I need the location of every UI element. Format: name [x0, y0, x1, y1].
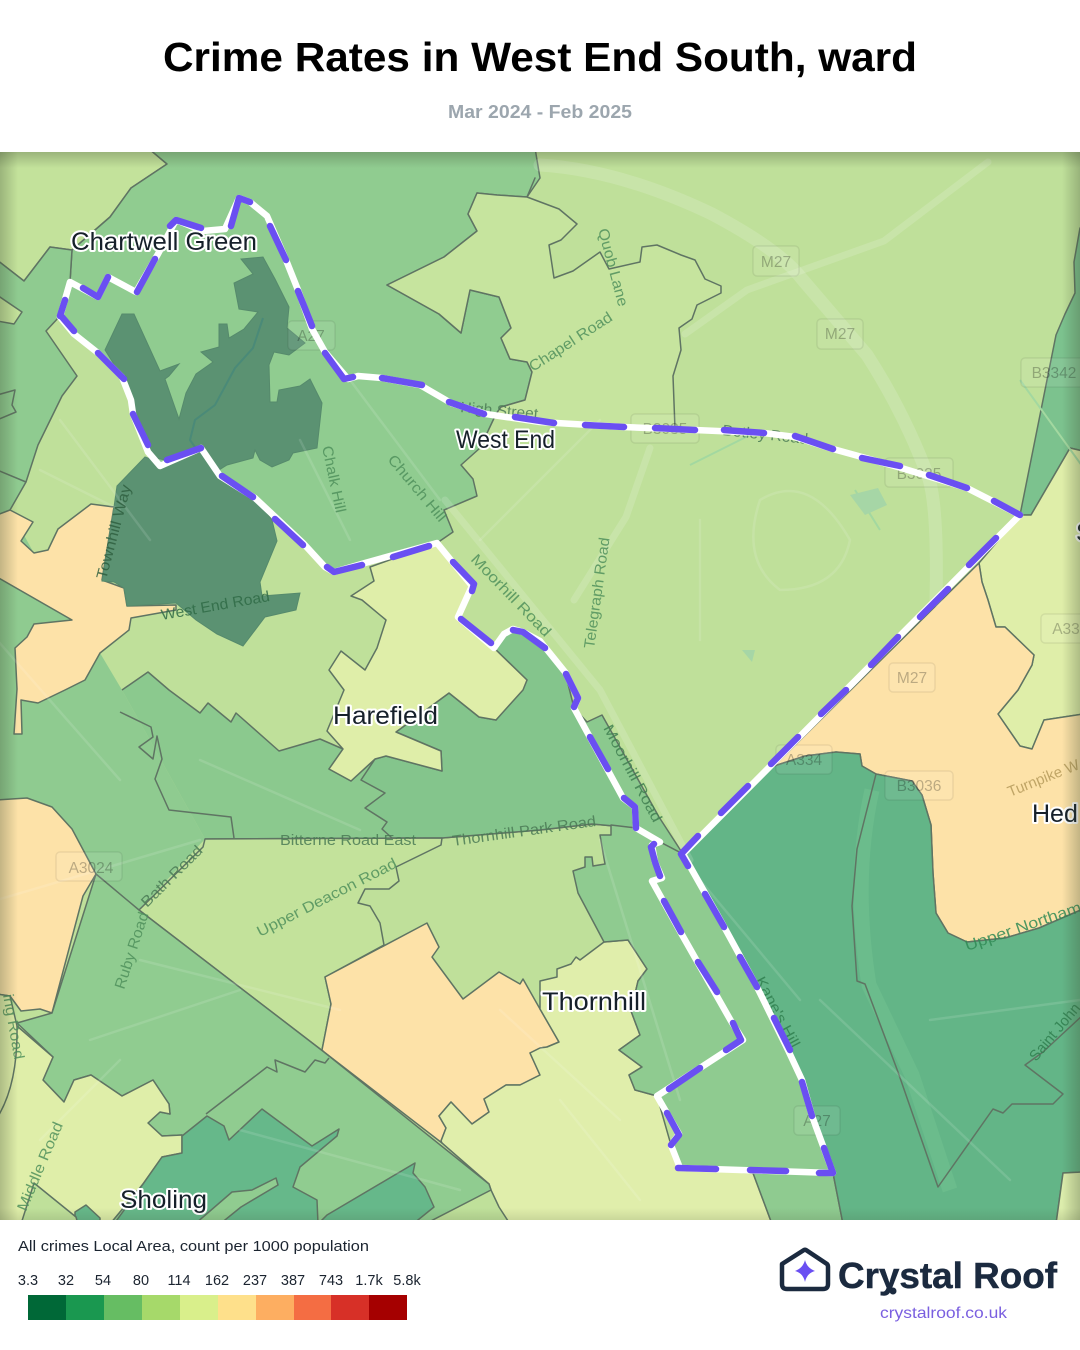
ward boundary: purple dashes	[60, 198, 1020, 1173]
region: pale south-west	[0, 994, 182, 1224]
region: dark green north patch	[105, 257, 322, 470]
region: medium green Harefield south	[122, 671, 610, 839]
road number shields: B3036	[897, 778, 941, 795]
region: pale top-left	[0, 148, 167, 281]
region: pale Thornhill	[439, 940, 772, 1224]
road number shields: A33	[1052, 621, 1080, 638]
road labels: Bitterne Road East	[280, 832, 417, 849]
road labels: Quob Lane	[594, 227, 631, 308]
legend scale labels: 32	[58, 1273, 74, 1289]
road number shields: A27	[297, 328, 325, 345]
road labels: Telegraph Road	[581, 536, 614, 650]
place labels: Harefield	[333, 702, 438, 730]
title: Crime Rates in West End South, ward	[163, 34, 917, 80]
legend scale labels: 80	[133, 1273, 149, 1289]
road labels: Thornhill Park Road	[451, 813, 597, 850]
region: pale yellow Harefield	[327, 543, 527, 781]
region: west medium green borders	[0, 247, 77, 510]
legend scale labels: 743	[319, 1273, 343, 1289]
road labels: Kane's Hill	[751, 974, 803, 1051]
region: Thornhill east medium green	[573, 825, 743, 1096]
region: south strip	[753, 1173, 843, 1224]
place labels: Chartwell Green	[71, 228, 257, 256]
place labels	[71, 228, 1080, 1214]
road number shields: A3024	[69, 860, 114, 877]
place labels: West End	[456, 426, 555, 454]
road number shields: B3035	[643, 421, 687, 438]
road number shields: M27	[825, 326, 855, 343]
legend	[18, 1239, 421, 1320]
region: bottom-right pale	[1056, 1172, 1080, 1224]
legend scale labels: 54	[95, 1273, 111, 1289]
region: ward strip east medium green	[652, 842, 833, 1173]
road labels: Botley Road	[722, 422, 809, 448]
road labels: Upper Deacon Road	[254, 855, 400, 941]
region: small dark patch	[75, 1205, 100, 1224]
region: pale north-east	[979, 448, 1080, 749]
legend title: All crimes Local Area, count per 1000 population	[18, 1239, 369, 1255]
place labels: Thornhill	[542, 988, 646, 1016]
region: orange far west	[0, 798, 96, 1013]
road number shields	[56, 246, 1080, 1135]
road labels	[0, 227, 1080, 1214]
legend scale labels: 387	[281, 1273, 305, 1289]
region: east darker green	[683, 752, 1080, 1224]
brand logo	[782, 1250, 1058, 1322]
region: light green Upper Deacon	[139, 838, 442, 1052]
road labels: Church Hill	[384, 452, 450, 525]
road number shields: M27	[761, 254, 791, 271]
region: orange west cluster	[0, 504, 176, 734]
legend scale labels	[18, 1273, 421, 1289]
region: far-west curve line	[0, 1026, 17, 1118]
region: north-west medium green	[60, 148, 540, 572]
road labels: Moorhill Road	[467, 551, 554, 640]
road: east dual carriageway band	[861, 790, 950, 1190]
road labels: Ruby Road	[112, 910, 153, 991]
region: Moorhill strip	[581, 714, 681, 852]
road labels: Middle Road	[14, 1119, 67, 1214]
place labels: Sholing	[120, 1186, 207, 1214]
region: big south-west medium green	[17, 874, 491, 1224]
road labels: Moorhill Road	[599, 722, 665, 825]
road labels: Upper Northam	[963, 899, 1080, 955]
road number shields: A334	[786, 752, 822, 769]
map edge vignette	[0, 152, 1080, 1220]
legend scale labels: 3.3	[18, 1273, 38, 1289]
region: internal boundaries	[0, 390, 329, 1114]
road number shields: B3342	[1032, 365, 1076, 382]
map panel	[0, 148, 1080, 1224]
road labels: West End Road	[160, 588, 271, 624]
road number shields: M27	[897, 670, 927, 687]
icon: house with star	[782, 1250, 828, 1289]
y tail dot	[890, 1288, 896, 1294]
region: east teal strip	[1020, 228, 1080, 515]
region: Sholing east darker patch	[318, 1163, 434, 1224]
legend scale labels: 114	[167, 1273, 191, 1289]
legend scale labels: 1.7k	[355, 1273, 383, 1289]
region: pale north centre	[387, 178, 721, 429]
road labels: High Street	[460, 399, 540, 423]
region: orange Thornhill west	[322, 923, 559, 1143]
region: orange north-east	[774, 563, 1080, 942]
stream in dark patch	[190, 318, 263, 450]
region: dark green south patch	[102, 450, 300, 646]
ward boundary: white base line	[60, 198, 1020, 1173]
road labels: Bath Road	[138, 842, 206, 911]
road labels: Chapel Road	[526, 309, 616, 375]
region: Harefield slightly darker part	[360, 690, 610, 839]
road labels: Townhill Way	[93, 482, 135, 581]
region: Sholing darker green	[114, 1109, 339, 1224]
region: Sholing inner lighter patch	[195, 1178, 278, 1224]
base: light green areas	[0, 152, 1080, 1220]
region: east internal boundary	[852, 774, 1080, 1187]
subtitle: date range: Mar 2024 - Feb 2025	[448, 101, 632, 122]
legend scale labels: 5.8k	[393, 1273, 421, 1289]
region: Middle Road light patch	[21, 1183, 78, 1224]
region: west sliver	[0, 295, 22, 324]
road number shields: B3035	[897, 466, 941, 483]
road number shields: A27	[803, 1113, 831, 1130]
region: west medium green	[0, 247, 205, 910]
website url: crystalroof.co.uk	[880, 1305, 1008, 1322]
legend scale labels: 162	[205, 1273, 229, 1289]
motorway M27 and main roads	[0, 162, 1080, 1200]
legend scale labels: 237	[243, 1273, 267, 1289]
road labels: Turnpike W	[1005, 756, 1080, 801]
legend colour ramp	[28, 1295, 407, 1320]
road labels: Chalk Hill	[318, 444, 349, 514]
place labels: Hed	[1032, 800, 1078, 828]
brand name: Crystal Roof	[838, 1255, 1058, 1296]
